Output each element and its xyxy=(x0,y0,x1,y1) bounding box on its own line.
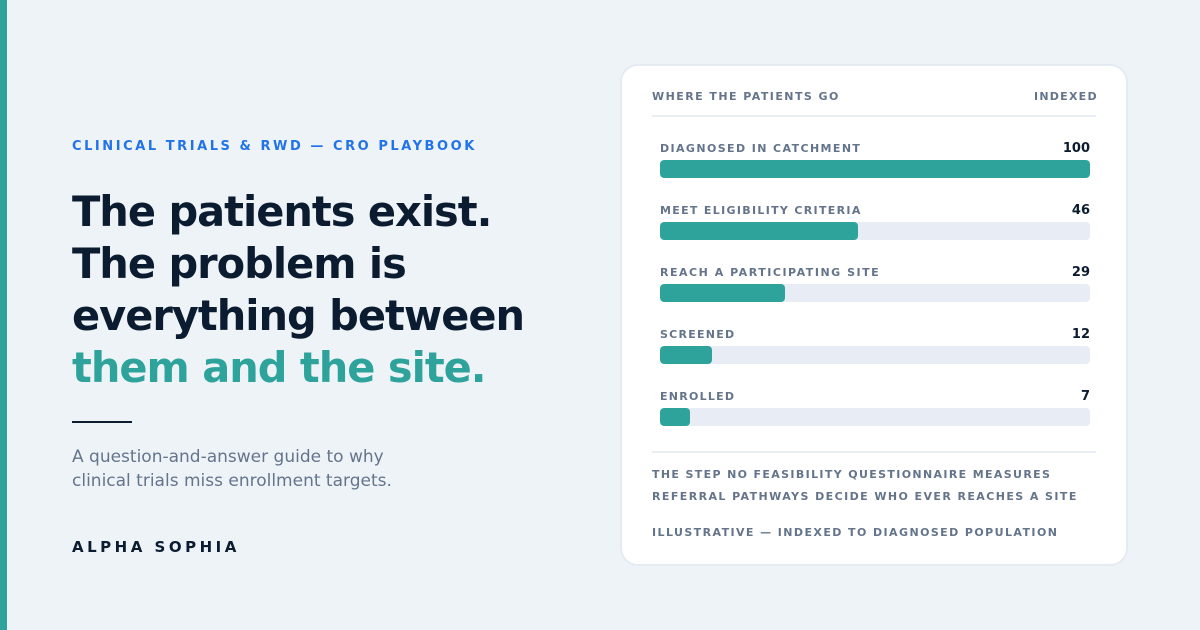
row: screened xyxy=(660,327,1090,364)
panel: funnel card xyxy=(620,64,1128,566)
eyebrow: CLINICAL TRIALS & RWD — CRO PLAYBOOK xyxy=(72,139,477,154)
row: enrolled xyxy=(660,389,1090,426)
bar xyxy=(660,160,1090,178)
row value: 100 xyxy=(1063,141,1090,156)
footnote: illustrative: ILLUSTRATIVE — INDEXED TO DIAGNOSED POPULATION xyxy=(652,526,1058,539)
row label: MEET ELIGIBILITY CRITERIA xyxy=(660,204,862,217)
row value: 12 xyxy=(1072,327,1090,342)
row label: DIAGNOSED IN CATCHMENT xyxy=(660,142,861,155)
title: them and the site. xyxy=(72,343,486,392)
footnote: referral pathways: REFERRAL PATHWAYS DECIDE WHO EVER REACHES A SITE xyxy=(652,490,1078,503)
accent bar xyxy=(0,0,7,630)
brand: ALPHA SOPHIA xyxy=(72,538,240,556)
row label: REACH A PARTICIPATING SITE xyxy=(660,266,880,279)
row label: SCREENED xyxy=(660,328,735,341)
row value: 46 xyxy=(1072,203,1090,218)
row value: 7 xyxy=(1081,389,1090,404)
subtitle: clinical trials miss enrollment targets. xyxy=(72,471,392,491)
panel index label: INDEXED xyxy=(1034,90,1098,103)
row value: 29 xyxy=(1072,265,1090,280)
title: The patients exist. xyxy=(72,187,491,236)
panel heading: WHERE THE PATIENTS GO xyxy=(652,90,840,103)
bar xyxy=(660,346,1090,364)
bar xyxy=(660,284,1090,302)
row: meet eligibility criteria xyxy=(660,203,1090,240)
footnote: questionnaire: THE STEP NO FEASIBILITY QUESTIONNAIRE MEASURES xyxy=(652,468,1051,481)
title: everything between xyxy=(72,291,524,340)
bar xyxy=(660,408,1090,426)
title xyxy=(72,187,524,392)
short divider xyxy=(72,421,132,423)
bar xyxy=(660,222,1090,240)
title: The problem is xyxy=(72,239,406,288)
row: reach a participating site xyxy=(660,265,1090,302)
subtitle: A question-and-answer guide to why xyxy=(72,447,384,467)
row: diagnosed in catchment xyxy=(660,141,1090,178)
row label: ENROLLED xyxy=(660,390,735,403)
subtitle xyxy=(72,447,392,491)
